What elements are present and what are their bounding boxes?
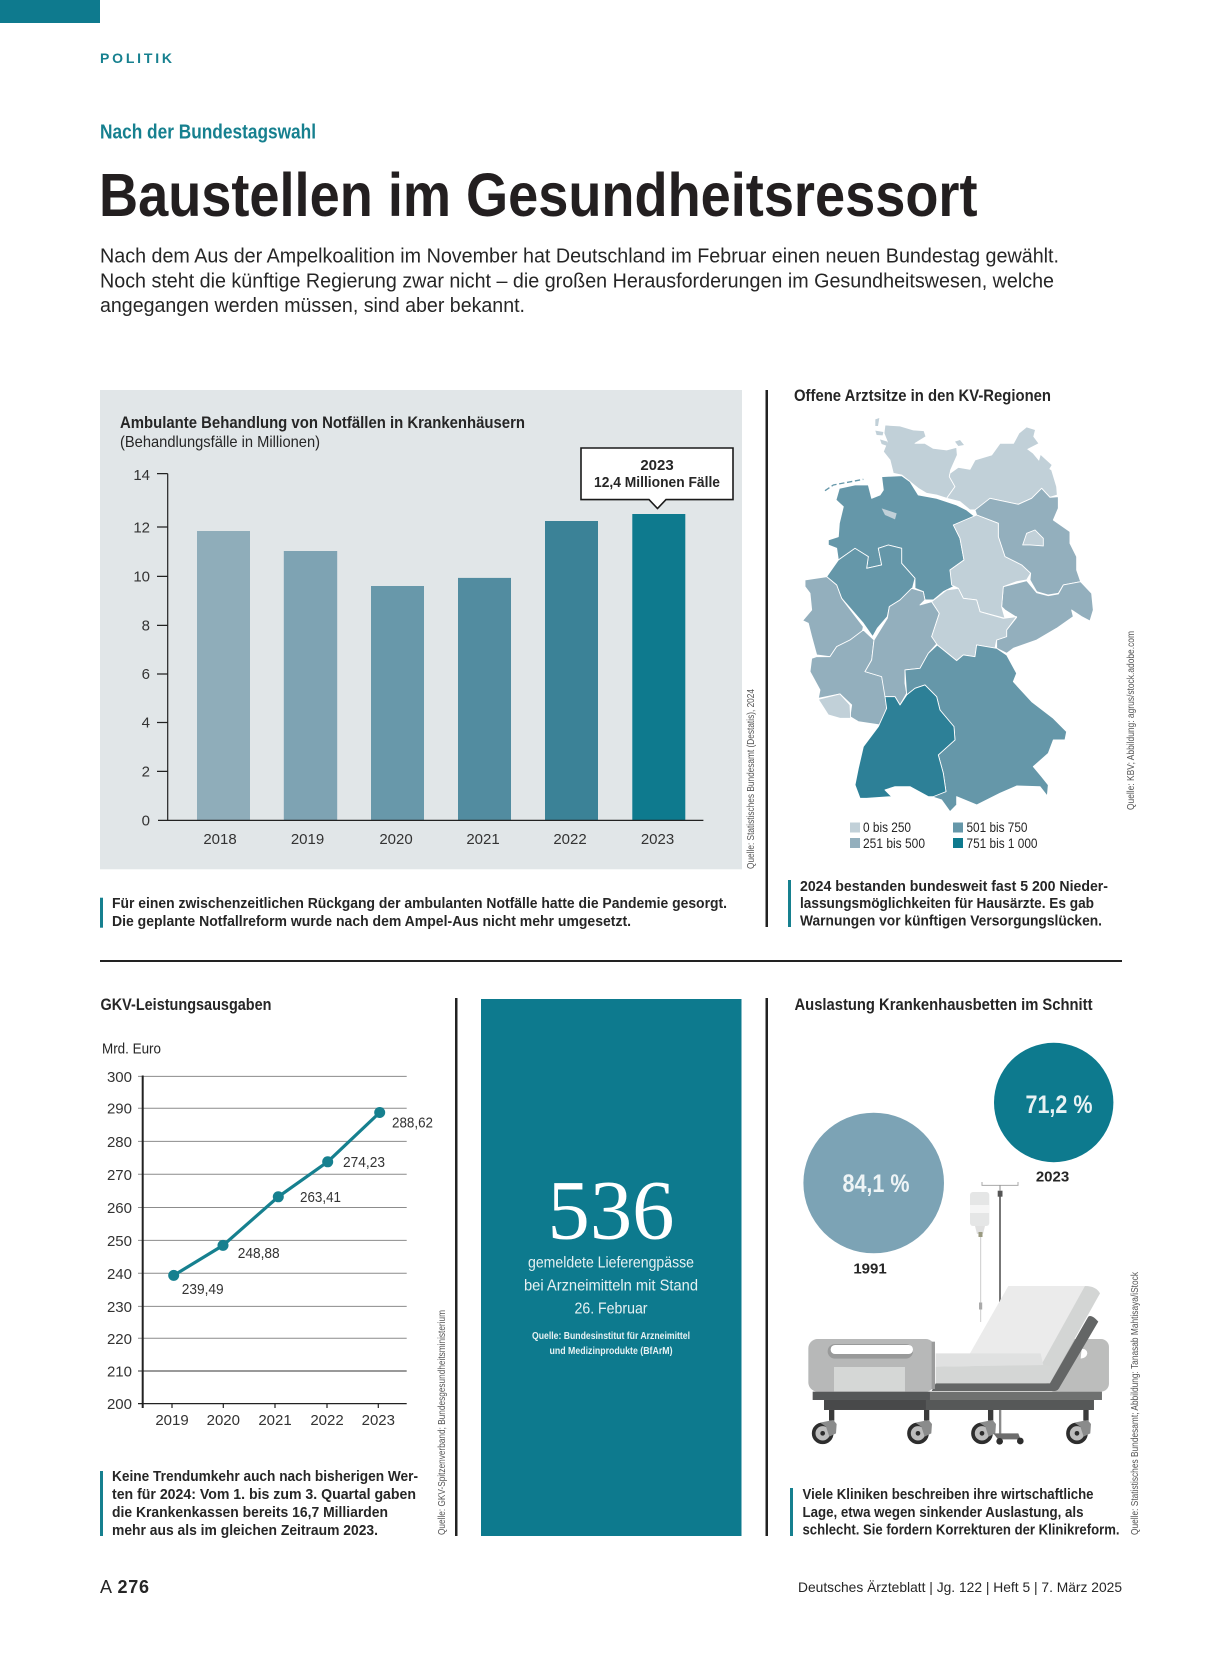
line chart: 300 [107, 1069, 132, 1086]
footer citation: Deutsches Ärzteblatt | Jg. 122 | Heft 5 | 7. März 2025 [798, 1579, 1122, 1595]
stat source [532, 1331, 690, 1357]
line chart: 2022 [310, 1412, 344, 1429]
circle 1991 [803, 1113, 944, 1278]
bar chart: 8 [142, 618, 150, 634]
chart subheading: (Behandlungsfälle in Millionen) [120, 434, 320, 451]
line chart: 230 [107, 1299, 132, 1316]
line chart [107, 1069, 433, 1429]
map legend: 0 bis 250 [863, 819, 911, 835]
circle 1991: 84,1 % [842, 1170, 910, 1198]
bar chart: 2021 [466, 831, 500, 848]
bar chart: 0 [142, 812, 150, 830]
callout: 2023 [640, 457, 674, 474]
line chart: 240 [107, 1266, 132, 1283]
caption: emergency cases [100, 895, 727, 930]
line chart heading: GKV-Leistungsausgaben [100, 996, 272, 1014]
caption: practices: Warnungen vor künftigen Versorgungslücken. [800, 912, 1102, 930]
kicker: Nach der Bundestagswahl [100, 122, 316, 144]
occupancy heading: Auslastung Krankenhausbetten im Schnitt [794, 996, 1093, 1014]
icon: infusion stand [970, 1182, 1018, 1322]
callout: 12,4 Millionen Fälle [594, 474, 720, 491]
caption: occupancy [790, 1486, 1120, 1538]
stat source: Quelle: Bundesinstitut für Arzneimittel [532, 1331, 690, 1342]
bar chart: 4 [142, 714, 150, 732]
stat description: gemeldete Lieferengpässe [528, 1254, 694, 1272]
caption: occupancy: Lage, etwa wegen sinkender Auslastung, als [802, 1504, 1084, 1521]
bar chart: 14 [133, 467, 150, 484]
caption: emergency cases: Die geplante Notfallreform wurde nach dem Ampel-Aus nicht mehr umgesetzt. [112, 913, 631, 930]
source: occupancy: Quelle: Statistisches Bundesamt; Abbildung: Tanasab Mahtisaya/iStock [1130, 1271, 1141, 1535]
caption: GKV: die Krankenkassen bereits 16,7 Milliarden [112, 1504, 388, 1521]
circle 2023: 2023 [1036, 1168, 1069, 1186]
line chart: 274,23 [343, 1154, 385, 1171]
map legend: 751 bis 1 000 [966, 835, 1038, 851]
callout [581, 448, 733, 508]
page number: A 276 [100, 1577, 149, 1597]
header tab [0, 0, 100, 23]
bar chart: 2 [142, 764, 150, 780]
circle 1991: 1991 [853, 1260, 887, 1278]
line chart: 270 [107, 1167, 132, 1184]
intro text: Noch steht die künftige Regierung zwar nicht – die großen Herausforderungen im Gesundheitswesen, welche [100, 270, 1054, 292]
panel: emergency bar chart [100, 390, 742, 869]
caption: occupancy: schlecht. Sie fordern Korrekturen der Klinikreform. [802, 1522, 1120, 1538]
source: map: Quelle: KBV; Abbildung: agrus/stock.adobe.com [1126, 631, 1137, 810]
stat source: und Medizinprodukte (BfArM) [550, 1346, 672, 1357]
line chart: 280 [107, 1134, 132, 1151]
map heading: Offene Arztsitze in den KV-Regionen [794, 387, 1051, 405]
caption: GKV: mehr aus als im gleichen Zeitraum 2023. [112, 1522, 378, 1539]
caption: emergency cases: Für einen zwischenzeitlichen Rückgang der ambulanten Notfälle hatte die Pandemie gesorgt. [112, 895, 727, 912]
line chart: 263,41 [300, 1189, 341, 1206]
panel: map of open practices [794, 387, 1093, 851]
line chart: 288,62 [392, 1114, 433, 1132]
unit label: Mrd. Euro [102, 1042, 161, 1058]
panel: GKV line chart [100, 996, 433, 1429]
circle 2023: 71,2 % [1026, 1091, 1092, 1119]
bar chart: 2019 [291, 831, 324, 848]
stat description: bei Arzneimitteln mit Stand [524, 1278, 698, 1294]
caption: GKV: ten für 2024: Vom 1. bis zum 3. Quartal gaben [112, 1486, 416, 1503]
intro text: angegangen werden müssen, sind aber bekannt. [100, 295, 525, 317]
bar chart: 2022 [553, 831, 587, 848]
section label: POLITIK [100, 50, 172, 66]
line chart: 2021 [258, 1412, 292, 1429]
caption: GKV: Keine Trendumkehr auch nach bisherigen Wer- [112, 1468, 418, 1485]
caption: occupancy: Viele Kliniken beschreiben ihre wirtschaftliche [802, 1486, 1094, 1503]
caption: practices [788, 878, 1108, 930]
line chart: 290 [107, 1101, 132, 1118]
bar chart: 6 [142, 666, 150, 683]
stat description [524, 1254, 698, 1318]
icon: hospital bed [808, 1286, 1109, 1445]
line chart: 220 [107, 1331, 132, 1348]
line chart: 2019 [155, 1412, 189, 1429]
map legend [850, 819, 1038, 851]
bar chart: 2023 [641, 831, 674, 848]
line chart: 239,49 [182, 1281, 224, 1298]
title: Baustellen im Gesundheitsressort [99, 161, 978, 229]
map legend: 501 bis 750 [966, 819, 1028, 835]
caption: practices: 2024 bestanden bundesweit fast 5 200 Nieder- [800, 878, 1108, 895]
stat description: 26. Februar [574, 1300, 648, 1318]
line chart: 250 [107, 1233, 132, 1250]
intro text: Nach dem Aus der Ampelkoalition im November hat Deutschland im Februar einen neuen Bundestag gewählt. [100, 246, 1059, 268]
source: bar chart: Quelle: Statistisches Bundesamt (Destatis), 2024 [746, 689, 757, 869]
chart heading: Ambulante Behandlung von Notfällen in Krankenhäusern [120, 414, 525, 432]
map of Germany [803, 418, 1093, 812]
bar chart: 12 [133, 520, 150, 536]
line chart: 2023 [362, 1412, 395, 1429]
source: line chart: Quelle: GKV-Spitzenverband; Bundesgesundheitsministerium [437, 1310, 448, 1535]
line chart: 210 [107, 1364, 132, 1380]
big number: 536 [548, 1164, 674, 1258]
bar chart: 10 [133, 568, 150, 586]
line chart: 200 [107, 1396, 132, 1413]
line chart: 260 [107, 1200, 132, 1217]
line chart: 2020 [207, 1412, 240, 1429]
panel: drug shortage stat [481, 999, 742, 1536]
bar chart: 2020 [379, 831, 413, 848]
bar chart [133, 467, 703, 848]
caption: practices: lassungsmöglichkeiten für Hausärzte. Es gab [800, 895, 1094, 912]
caption: GKV [100, 1468, 418, 1539]
circle 2023 [994, 1043, 1113, 1186]
panel: hospital bed occupancy [794, 996, 1113, 1445]
map legend: 251 bis 500 [863, 835, 925, 851]
line chart: 248,88 [238, 1245, 280, 1262]
intro text [100, 246, 1059, 317]
bar chart: 2018 [203, 831, 237, 848]
